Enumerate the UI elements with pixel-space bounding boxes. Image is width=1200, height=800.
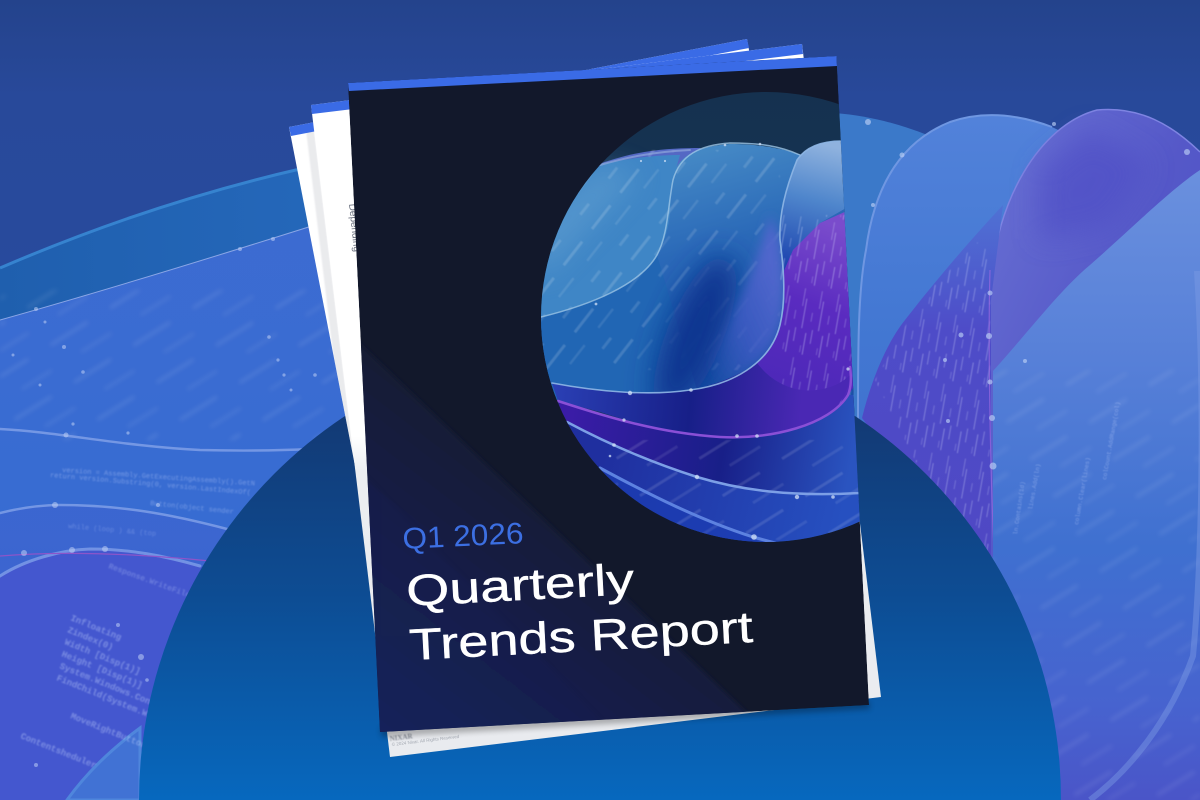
cover title xyxy=(408,564,754,660)
code text: colCount.AddRange(col) xyxy=(1101,401,1122,480)
artwork: bright edges xyxy=(541,141,860,543)
circular artwork xyxy=(541,92,860,542)
dots xyxy=(865,119,1190,470)
artwork: main sheet xyxy=(541,144,854,400)
artwork: upper right patch xyxy=(781,141,844,270)
code text: MoveRightButton xyxy=(69,712,148,751)
code text: Zindex(0) xyxy=(66,626,115,653)
ribbon: purple streaked band xyxy=(862,205,1003,560)
ribbon: lower indigo sheet xyxy=(0,505,340,800)
code text: Height [Disp(1)] xyxy=(60,650,144,691)
cover label: Q1 2026 xyxy=(402,517,524,556)
code text: while (loop ) && (top xyxy=(68,523,156,539)
code text: Contentsheduler xyxy=(19,732,98,771)
ribbon: small bottom arc xyxy=(67,728,140,800)
ribbon: main blue sheet xyxy=(0,170,500,800)
big dark blue circle xyxy=(139,339,1061,800)
left background ribbons xyxy=(0,120,600,800)
code text: Infloating xyxy=(69,614,123,643)
code text: Button(object sender xyxy=(150,500,234,517)
code text: column.Clear(lines) xyxy=(1073,457,1092,525)
code text xyxy=(1012,401,1122,535)
report stack xyxy=(289,39,881,757)
artwork: dark cap xyxy=(540,90,880,545)
ribbon: purple right sheet xyxy=(990,109,1200,560)
cover diagonal sheen xyxy=(360,340,748,732)
cover shadow xyxy=(380,701,870,737)
artwork: streak texture xyxy=(540,150,780,370)
cover top band xyxy=(348,56,837,91)
page: front cover xyxy=(340,56,880,750)
code text: FindChild(System.Windows xyxy=(55,674,179,731)
wave lines xyxy=(0,429,310,576)
code text: ln.Contains(1d) xyxy=(1012,481,1026,535)
artwork: purple field xyxy=(634,212,854,425)
page: back sheet xyxy=(289,39,750,466)
cover body xyxy=(348,56,869,732)
artwork: dots xyxy=(595,143,850,540)
page text: footer: NIXAR xyxy=(389,732,414,743)
code text xyxy=(19,467,255,771)
cover title: Trends Report xyxy=(408,603,754,670)
code text: System.Windows.Controls xyxy=(58,662,177,717)
code text: return version.Substring(0, version.LastIndexOf( xyxy=(50,472,251,498)
ribbon: blue front sheet xyxy=(900,170,1200,800)
artwork: lower bands xyxy=(552,363,850,437)
code text: Response.WriteFile( xyxy=(107,562,196,602)
ribbon: outer teal band xyxy=(0,120,600,500)
ribbon: light blue sheet A xyxy=(858,115,1120,562)
page: middle sheet xyxy=(311,44,881,757)
page text: footer: © 2024 Nixar. All Rights Reserved xyxy=(391,733,460,747)
artwork: top lilac edge xyxy=(598,148,701,167)
page text: vertical heading: Depending xyxy=(346,203,362,252)
dots xyxy=(12,237,317,767)
right background ribbons xyxy=(835,109,1200,800)
code text: version = Assembly.GetExecutingAssembly().GetN xyxy=(62,467,255,488)
code text: lines.Add(ln) xyxy=(1027,463,1042,510)
artwork: dark central shadow xyxy=(641,246,748,392)
code text: Width [Disp(1)] xyxy=(63,638,142,677)
artwork: ribbon two shading xyxy=(718,219,784,376)
cover title: Quarterly xyxy=(405,555,635,616)
ribbon: back blue xyxy=(835,113,1010,570)
